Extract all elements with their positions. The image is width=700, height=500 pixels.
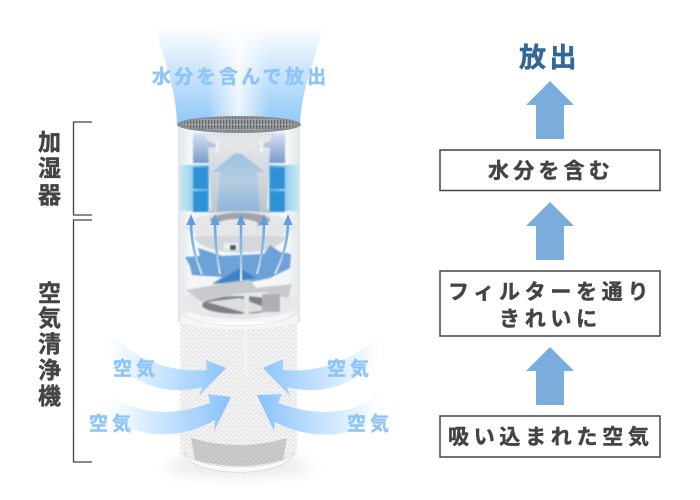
step box: フィルターを通り きれいに: フィルターを通り	[448, 281, 653, 304]
fan deck	[179, 212, 299, 319]
step box: 吸い込まれた空気: 吸い込まれた空気	[448, 426, 654, 449]
air purifier device	[167, 116, 311, 476]
arrow: to release	[526, 81, 574, 139]
step box: 水分を含む: 水分を含む	[488, 160, 614, 183]
arrow: air in, lower left	[110, 394, 231, 434]
humidifier filter	[180, 133, 299, 213]
bracket: air purifier	[74, 220, 92, 462]
floor shadow	[167, 456, 311, 476]
bracket: humidifier	[74, 122, 92, 215]
heading: 空気清浄機: 空	[38, 280, 61, 306]
heading: 空気清浄機: 清	[38, 331, 61, 357]
step box: 水分を含む	[440, 150, 660, 190]
inner mechanism	[179, 287, 299, 319]
top grille	[177, 116, 301, 133]
label: air upper right: 空気	[327, 358, 373, 380]
heading: 放出: 放出	[519, 43, 580, 73]
label: air lower left: 空気	[89, 413, 135, 435]
perforated filter	[180, 322, 297, 472]
heading: 加湿器	[38, 129, 61, 208]
central core with up arrow	[208, 145, 271, 213]
arrow: air in, upper left	[108, 331, 226, 396]
body ring	[180, 312, 298, 330]
heading: 空気清浄機: 気	[38, 305, 61, 331]
heading: 加湿器: 湿	[38, 155, 61, 181]
arrow: to moisture	[526, 202, 574, 260]
internal air flow arrows	[191, 222, 288, 281]
arrow: to filter	[526, 347, 574, 405]
label: air lower right: 空気	[347, 413, 393, 435]
heading: 加湿器: 加	[38, 129, 61, 155]
step box: フィルターを通り きれいに: きれいに	[499, 308, 602, 331]
step box: 吸い込まれた空気	[440, 416, 660, 457]
glass upper body	[178, 126, 300, 322]
label: air upper left: 空気	[113, 358, 159, 380]
heading: 空気清浄機: 機	[38, 383, 61, 409]
filter base	[191, 438, 287, 466]
mist plume	[155, 25, 323, 124]
step box: フィルターを通り きれいに	[440, 271, 660, 336]
arrow: air in, lower right	[257, 394, 378, 435]
heading: 空気清浄機	[38, 280, 61, 409]
label: 水分を含んで放出: 水分を含んで放出	[152, 66, 329, 88]
heading: 加湿器: 器	[38, 182, 61, 208]
arrow: air in, upper right	[263, 333, 381, 396]
blue fan blades	[185, 245, 291, 284]
heading: 空気清浄機: 浄	[38, 357, 61, 383]
